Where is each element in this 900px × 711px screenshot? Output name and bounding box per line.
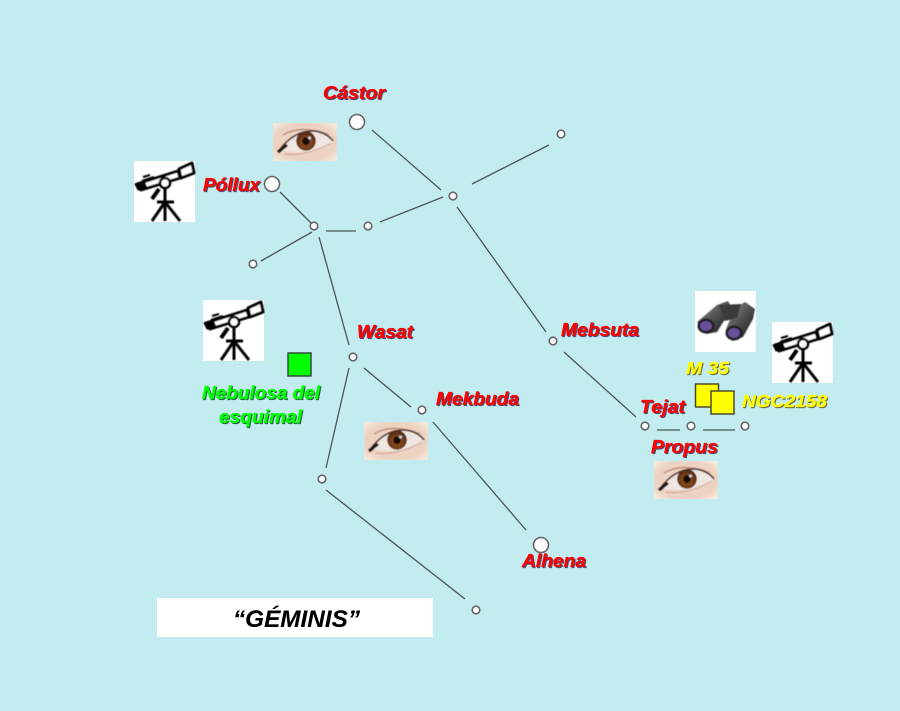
stars [249,114,749,614]
label: Propus: Propus [651,437,718,457]
label: Tejat: Tejat [640,397,686,417]
icon: eye near Propus [654,461,718,499]
label: NGC2158: NGC2158 [742,391,827,411]
marker: green square [288,353,311,376]
icon: binoculars [695,291,756,352]
icon: telescope near Póllux [134,161,195,222]
label: Nebulosa del esquimal: esquimal [219,407,303,427]
label: M 35: M 35 [686,358,729,378]
label: Mebsuta: Mebsuta [561,320,639,340]
label: Nebulosa del esquimal [202,383,321,427]
icon: eye near Cástor [273,123,337,161]
label: Cástor: Cástor [323,83,386,103]
constellation lines [261,130,735,599]
title: Géminis: “GÉMINIS” [233,605,360,633]
icon: telescope near NGC2158 [772,322,833,383]
label: Nebulosa del esquimal: Nebulosa del [202,383,321,403]
title: Géminis [157,598,433,637]
icon: telescope near Nebulosa del esquimal [203,300,264,361]
label: Póllux: Póllux [203,175,261,195]
marker: yellow squares [696,384,734,414]
label: Mekbuda: Mekbuda [436,389,519,409]
label: Wasat: Wasat [357,322,414,342]
icon: eye near Mekbuda [364,422,428,460]
label: Alhena: Alhena [521,551,586,571]
